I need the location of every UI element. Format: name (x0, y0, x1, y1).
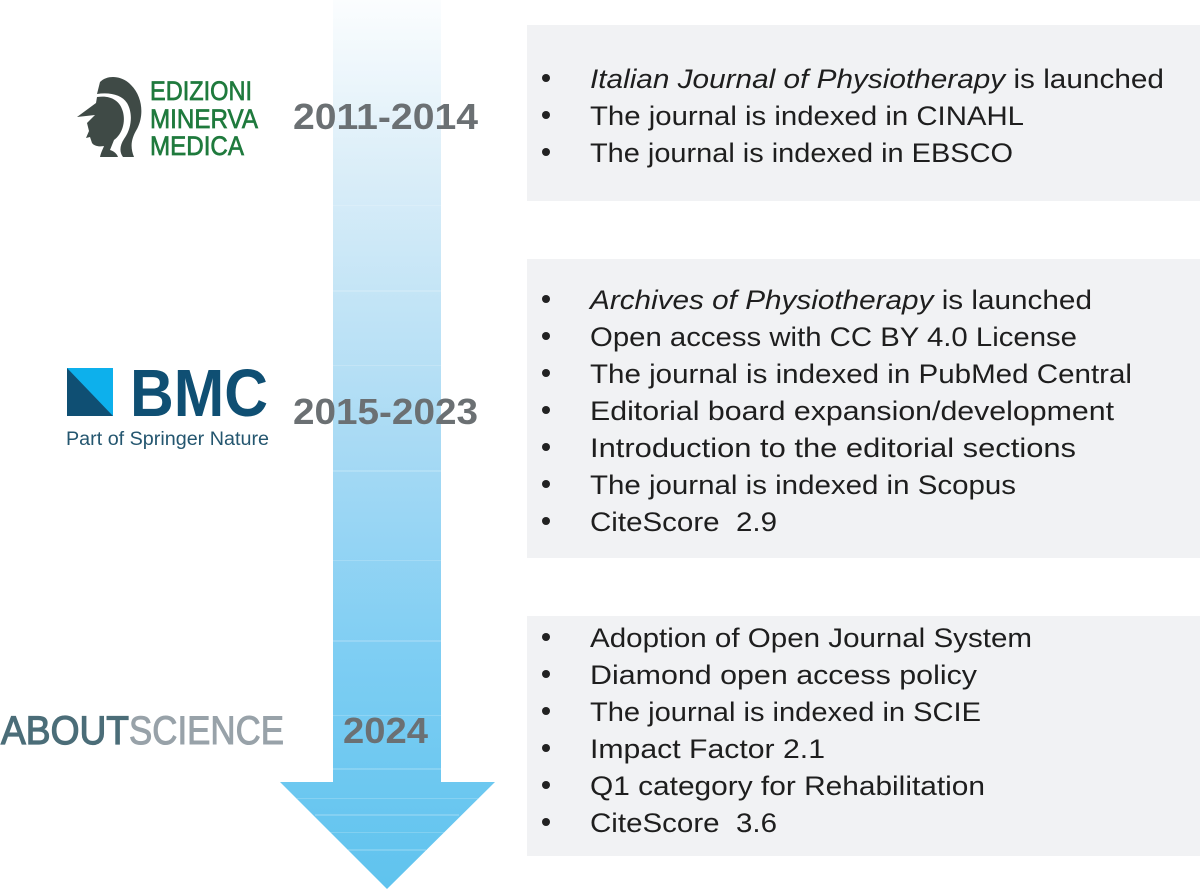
logo: Edizioni Minerva Medica (77, 76, 258, 161)
panel: 2024 milestones: Adoption of Open Journal System (590, 623, 1032, 653)
timeline arrow (280, 0, 495, 889)
year label: 2011-2014: 2011-2014 (293, 96, 478, 137)
logo: AboutScience: SCIENCE (129, 709, 284, 753)
panel: 2011-2014 milestones: The journal is indexed in CINAHL (590, 101, 1024, 131)
panel: 2024 milestones: The journal is indexed in SCIE (590, 697, 981, 727)
panel: 2015-2023 milestones: Editorial board expansion/development (590, 396, 1115, 426)
panel: 2024 milestones: Q1 category for Rehabilitation (590, 771, 985, 801)
panel: 2015-2023 milestones: The journal is indexed in PubMed Central (590, 359, 1132, 389)
panel: 2015-2023 milestones: CiteScore 2.9 (590, 507, 777, 537)
icon: helmeted head (77, 77, 141, 157)
panel: 2024 milestones: Impact Factor 2.1 (590, 734, 825, 764)
logo tagline: Part of Springer Nature (66, 429, 269, 450)
panel: 2015-2023 milestones (527, 259, 1200, 558)
logo: Edizioni Minerva Medica: MEDICA (150, 131, 244, 161)
panel: 2015-2023 milestones: Archives of Physiotherapy is launched (588, 285, 1092, 315)
logo wordmark: BMC (130, 356, 268, 431)
panel: 2015-2023 milestones: The journal is indexed in Scopus (590, 470, 1016, 500)
panel: 2024 milestones: Diamond open access policy (590, 660, 978, 690)
panel: 2011-2014 milestones: The journal is indexed in EBSCO (590, 138, 1013, 168)
panel: 2011-2014 milestones: Italian Journal of Physiotherapy is launched (590, 64, 1164, 94)
panel: 2015-2023 milestones: Open access with CC BY 4.0 License (590, 322, 1077, 352)
logo text: EDIZIONI (150, 76, 252, 106)
year label: 2015-2023: 2015-2023 (293, 391, 478, 432)
logo: AboutScience: ABOUT (1, 709, 129, 753)
panel: 2024 milestones (527, 616, 1200, 856)
logo: AboutScience (1, 709, 284, 753)
year label: 2024: 2024 (343, 710, 428, 751)
panel: 2011-2014 milestones (527, 25, 1200, 201)
logo: Edizioni Minerva Medica: MINERVA (150, 104, 258, 134)
panel: 2024 milestones: CiteScore 3.6 (590, 808, 777, 838)
icon: BMC square (67, 368, 113, 416)
panel: 2015-2023 milestones: Introduction to the editorial sections (590, 433, 1076, 463)
logo: BMC (66, 356, 269, 450)
